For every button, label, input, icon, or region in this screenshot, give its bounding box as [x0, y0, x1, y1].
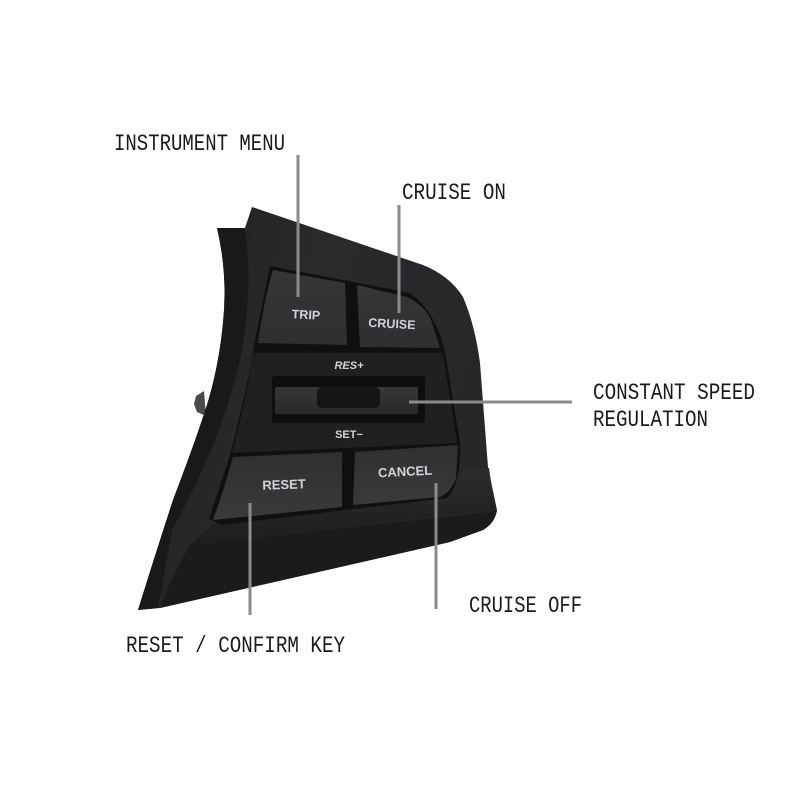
- mounting bolt: [194, 391, 206, 416]
- label: constant speed regulation: [593, 380, 755, 433]
- set- text: SET−: [335, 429, 363, 441]
- res+ text: RES+: [334, 360, 364, 372]
- lower trim: [160, 510, 497, 608]
- label: reset confirm key: RESET / CONFIRM KEY: [126, 633, 345, 659]
- label: constant speed regulation: REGULATION: [593, 407, 708, 433]
- cruise text: CRUISE: [368, 316, 416, 332]
- leader line: constant speed: [409, 400, 572, 404]
- slider knob: [317, 387, 380, 408]
- lower band: [190, 468, 495, 545]
- leader line: cruise on: [398, 205, 400, 313]
- button recess: [209, 266, 460, 525]
- leader line: reset: [248, 503, 252, 615]
- reset text: RESET: [262, 476, 306, 493]
- label: constant speed regulation: CONSTANT SPEED: [593, 380, 755, 406]
- button: cruise: [357, 285, 440, 348]
- leader line: instrument menu: [296, 155, 300, 297]
- button: reset: [213, 452, 342, 520]
- slider: [275, 387, 418, 414]
- label: instrument menu: INSTRUMENT MENU: [114, 131, 285, 157]
- button: cancel: [353, 445, 458, 505]
- label: cruise on: CRUISE ON: [402, 180, 506, 206]
- slider cavity: [272, 376, 425, 423]
- leader line: cruise off: [434, 483, 438, 609]
- trip text: TRIP: [291, 307, 321, 323]
- label: cruise off: CRUISE OFF: [469, 593, 582, 619]
- button: trip: [258, 270, 347, 345]
- panel body: [138, 207, 497, 610]
- cancel text: CANCEL: [378, 463, 433, 480]
- left edge shading: [138, 228, 249, 610]
- steering wheel control panel: [138, 207, 497, 610]
- speed regulation panel: [232, 353, 457, 453]
